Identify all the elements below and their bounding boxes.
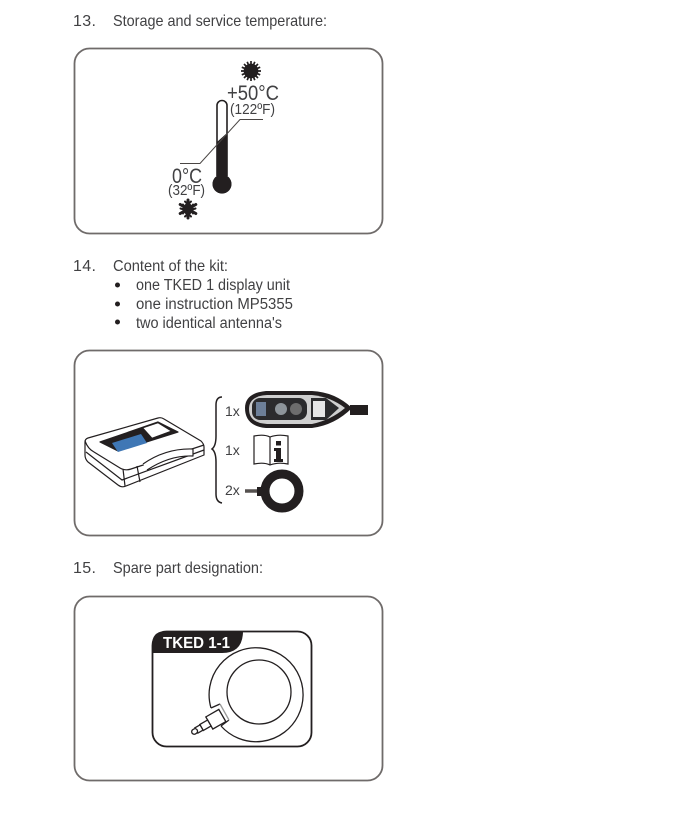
heading: section 13: Storage and service temperature: <box>113 13 327 30</box>
text: lower temperature limit <box>168 165 205 199</box>
antenna plug <box>188 709 226 739</box>
text: quantities: 1x <box>225 403 240 419</box>
panel: temperature <box>74 48 382 234</box>
leader lines <box>180 120 263 164</box>
icon: carrying case <box>85 418 204 487</box>
icon: antenna ring <box>188 648 303 742</box>
text: upper temperature limit: +50°C <box>227 82 279 105</box>
text: upper temperature limit <box>227 82 279 118</box>
icon: display unit <box>245 391 368 428</box>
text: quantities: 1x <box>225 442 240 458</box>
list: kit contents: two identical antenna's <box>136 315 282 332</box>
text: quantities <box>225 403 240 498</box>
list: kit contents <box>115 277 293 332</box>
text: lower temperature limit: (32ºF) <box>168 182 205 199</box>
panel: kit <box>74 350 382 536</box>
text: upper temperature limit: (122ºF) <box>230 101 275 118</box>
heading: section 14 <box>73 258 228 275</box>
heading: section 14: 14. <box>73 258 96 275</box>
heading: section 14: Content of the kit: <box>113 258 228 275</box>
panel: spare part <box>74 596 382 780</box>
icon: instruction book <box>254 435 288 465</box>
icon: antenna <box>245 474 299 508</box>
icon: thermometer <box>212 100 232 194</box>
label: part number <box>152 631 243 653</box>
heading: section 13: 13. <box>73 13 96 30</box>
list: kit contents: one instruction MP5355 <box>136 296 293 313</box>
text: lower temperature limit: 0°C <box>172 165 202 188</box>
heading: section 15: Spare part designation: <box>113 560 263 577</box>
icon: snowflake <box>180 200 196 218</box>
text: quantities: 2x <box>225 482 240 498</box>
box: spare part card <box>152 631 312 746</box>
label: part number: TKED 1-1 <box>163 635 230 652</box>
brace <box>212 397 222 503</box>
heading: section 15: 15. <box>73 560 96 577</box>
icon: sun <box>241 61 261 81</box>
list: kit contents: one TKED 1 display unit <box>136 277 291 294</box>
